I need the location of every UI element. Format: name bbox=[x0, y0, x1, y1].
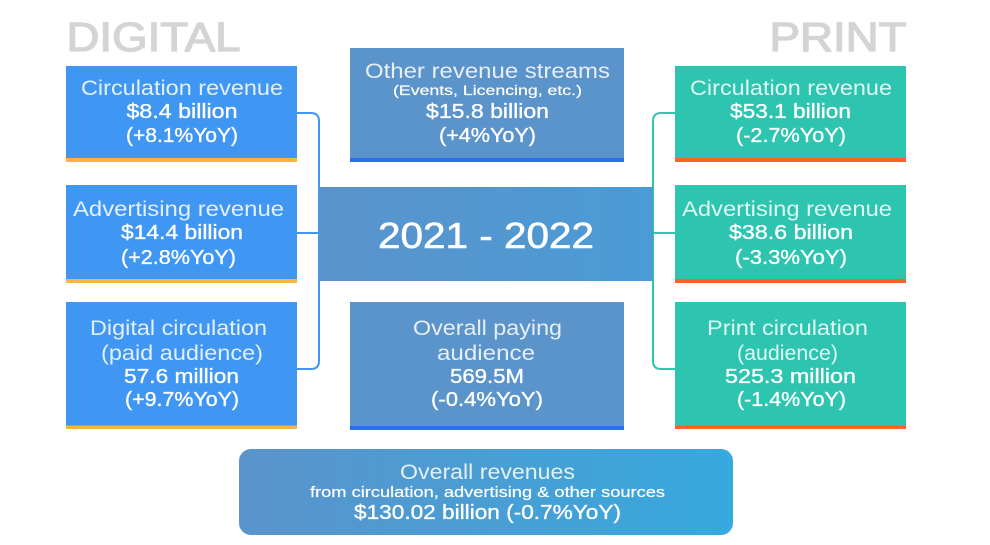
panel: digital circulation paid audience: 57.6 million bbox=[124, 366, 239, 388]
panel: digital advertising revenue: Advertising revenue bbox=[73, 198, 284, 221]
panel: print circulation audience: (-1.4%YoY) bbox=[737, 389, 846, 411]
panel: print circulation revenue: Circulation revenue bbox=[690, 77, 892, 100]
panel: print circulation audience: 525.3 million bbox=[725, 366, 856, 388]
heading: PRINT: PRINT bbox=[770, 14, 906, 60]
panel: digital circulation revenue bbox=[66, 66, 297, 162]
panel: print advertising revenue: $38.6 billion bbox=[729, 222, 853, 244]
panel: overall paying audience: 569.5M bbox=[450, 366, 524, 388]
panel: overall paying audience: Overall paying bbox=[413, 317, 562, 340]
panel: print circulation revenue bbox=[675, 66, 906, 162]
heading: DIGITAL: DIGITAL bbox=[66, 14, 240, 60]
panel: digital circulation paid audience: Digital circulation bbox=[90, 317, 267, 340]
panel: digital circulation revenue: (+8.1%YoY) bbox=[126, 125, 238, 147]
panel: print circulation audience: Print circulation bbox=[707, 317, 868, 340]
panel: central year band: 2021 - 2022 bbox=[378, 215, 594, 256]
panel: other revenue streams: Other revenue streams bbox=[365, 60, 610, 83]
panel: print circulation audience bbox=[675, 302, 906, 429]
panel: digital advertising revenue: $14.4 billion bbox=[121, 222, 243, 244]
panel: other revenue streams: $15.8 billion bbox=[426, 101, 549, 123]
panel: digital circulation revenue: Circulation revenue bbox=[81, 77, 283, 100]
panel: other revenue streams bbox=[350, 48, 624, 162]
panel: overall revenues: $130.02 billion (-0.7%YoY) bbox=[354, 502, 621, 524]
panel: print circulation revenue: $53.1 billion bbox=[730, 101, 851, 123]
panel: print circulation audience: (audience) bbox=[737, 342, 838, 365]
panel: digital advertising revenue bbox=[66, 185, 297, 283]
panel: overall revenues: Overall revenues bbox=[400, 461, 575, 484]
panel: digital advertising revenue: (+2.8%YoY) bbox=[121, 247, 236, 269]
panel: digital circulation paid audience: (paid audience) bbox=[101, 342, 263, 365]
panel: central year band bbox=[319, 187, 653, 281]
panel: overall paying audience: (-0.4%YoY) bbox=[431, 389, 543, 411]
panel: print advertising revenue: Advertising revenue bbox=[682, 198, 892, 221]
panel: print advertising revenue: (-3.3%YoY) bbox=[735, 247, 847, 269]
panel: overall revenues: from circulation, advertising & other sources bbox=[310, 485, 665, 501]
panel: digital circulation revenue: $8.4 billion bbox=[126, 101, 238, 123]
panel: other revenue streams: (Events, Licencing, etc.) bbox=[393, 83, 582, 98]
connector: print bracket bbox=[653, 113, 675, 369]
panel: overall paying audience: audience bbox=[437, 342, 535, 365]
panel: print advertising revenue bbox=[675, 185, 906, 283]
panel: other revenue streams: (+4%YoY) bbox=[439, 125, 536, 147]
panel: digital circulation paid audience bbox=[66, 302, 297, 429]
connector: digital bracket bbox=[297, 113, 319, 369]
panel: digital circulation paid audience: (+9.7%YoY) bbox=[125, 389, 239, 411]
panel: overall revenues bbox=[239, 449, 733, 535]
panel: print circulation revenue: (-2.7%YoY) bbox=[736, 125, 846, 147]
panel: overall paying audience bbox=[350, 302, 624, 430]
